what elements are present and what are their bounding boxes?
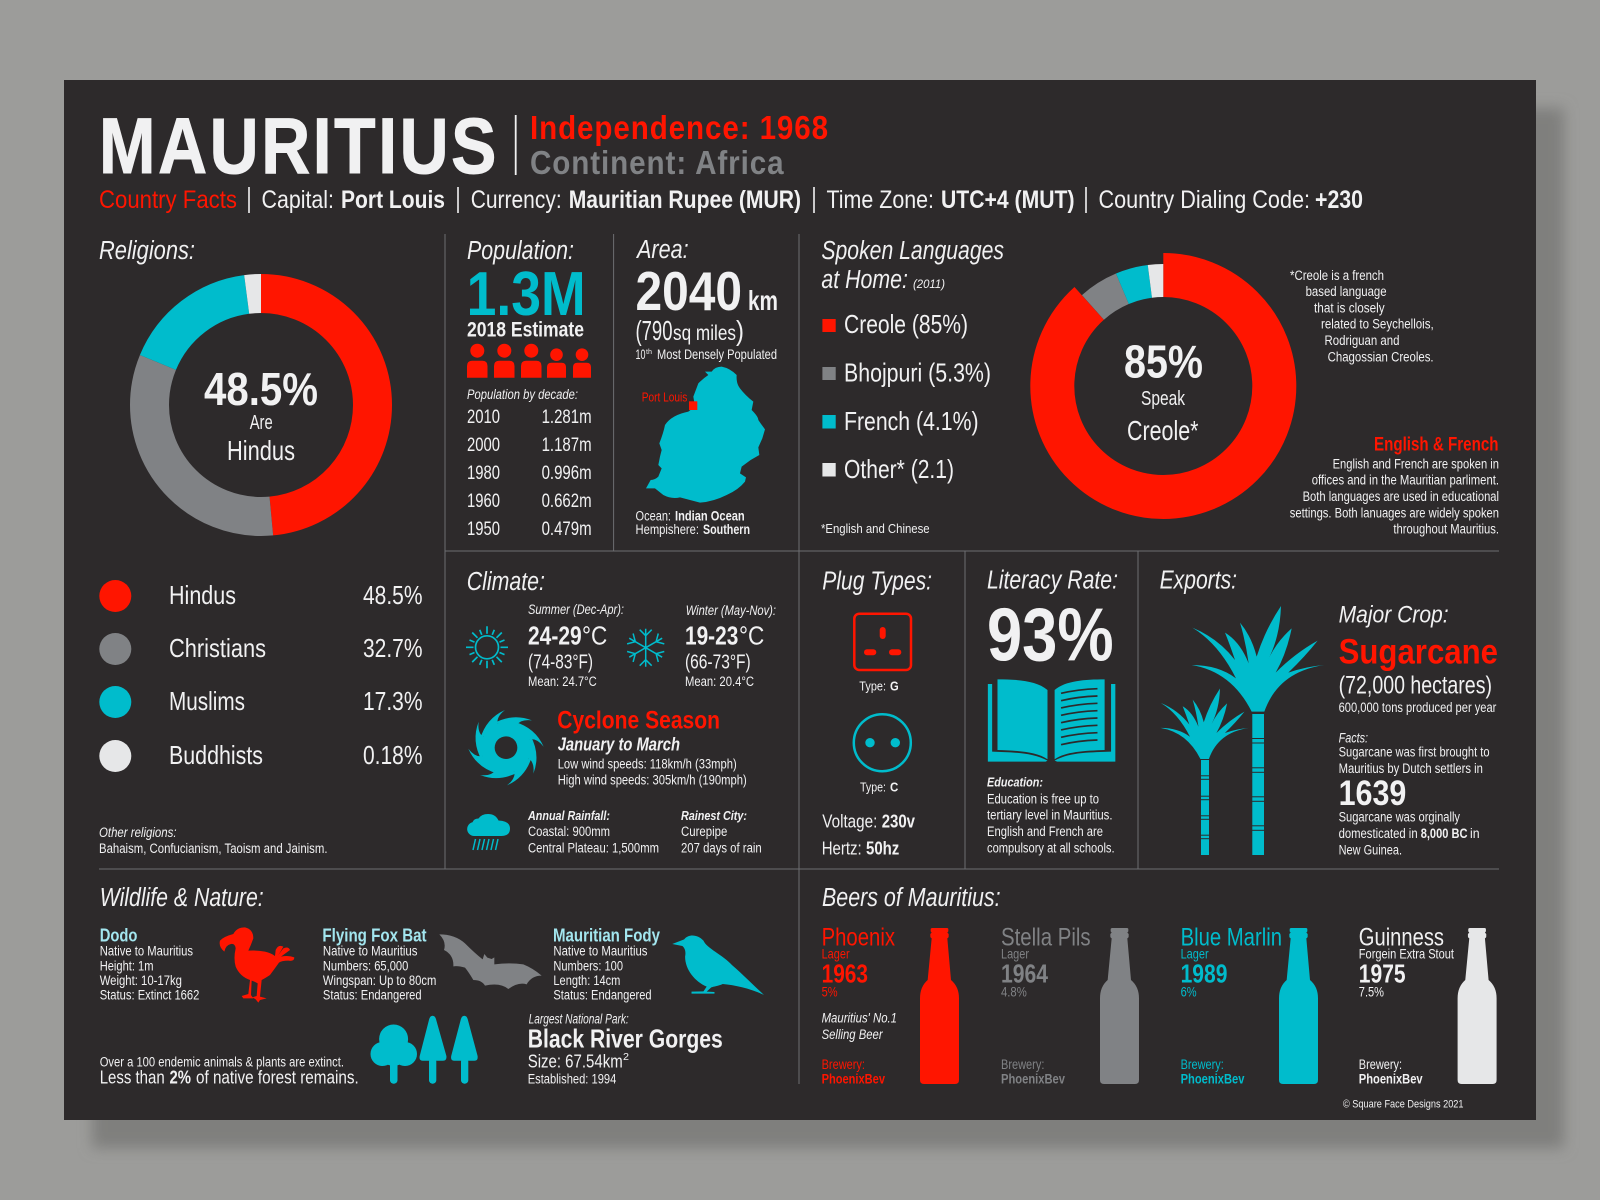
text: rainfall bbox=[527, 808, 659, 855]
icon: plug type C bbox=[854, 714, 911, 771]
beer: phoenix: Lager bbox=[822, 945, 850, 961]
note: creole bbox=[1290, 268, 1434, 364]
text: national park bbox=[528, 1011, 723, 1086]
legend: languages bbox=[822, 309, 991, 484]
legend: languages: Other* (2.1) bbox=[844, 454, 954, 484]
panel: spoken languages bbox=[821, 237, 1499, 537]
icon: dodo bbox=[220, 927, 294, 1003]
icon: trees bbox=[370, 1016, 478, 1084]
text: national park: Black River Gorges bbox=[528, 1023, 723, 1053]
text: education: Education is free up to bbox=[987, 791, 1099, 806]
text: dodo: Status: Extinct 1662 bbox=[100, 987, 199, 1002]
text: mauritian fody: Numbers: 100 bbox=[553, 959, 623, 974]
text: sugarcane facts: Facts: bbox=[1339, 731, 1368, 746]
country facts strip: Country Dialing Code: bbox=[1098, 186, 1310, 214]
table: population by decade: 1.281m bbox=[542, 407, 592, 428]
text: major crop: (72,000 hectares) bbox=[1339, 671, 1492, 699]
legend: religions: Buddhists bbox=[169, 740, 263, 770]
table: population by decade: 2000 bbox=[467, 435, 500, 456]
text: rainest city bbox=[681, 808, 762, 855]
independence: Independence: 1968 bbox=[530, 109, 829, 146]
panel: wildlife and nature bbox=[100, 884, 764, 1087]
beer: stella pils: Stella Pils bbox=[1001, 924, 1091, 952]
text: cyclone season: January to March bbox=[558, 735, 680, 755]
beer: stella pils: 4.8% bbox=[1001, 985, 1027, 1000]
beer: guinness: Forgein Extra Stout bbox=[1359, 945, 1454, 961]
heading: beers: Beers of Mauritius: bbox=[822, 884, 1001, 912]
note: english and french: English and French are spoken in bbox=[1333, 456, 1499, 471]
icon: red bottle bbox=[920, 928, 959, 1084]
text: mauritian fody bbox=[553, 926, 660, 1002]
donut chart: religions bbox=[150, 294, 372, 516]
note: english and french bbox=[1290, 435, 1499, 537]
text: dodo: Native to Mauritius bbox=[100, 944, 193, 959]
text: sugarcane facts: Sugarcane was first brought to bbox=[1339, 745, 1490, 760]
icon: cyclone bbox=[461, 703, 551, 793]
country facts strip: Port Louis bbox=[341, 186, 445, 214]
text: voltage and hertz: Voltage: bbox=[822, 812, 877, 832]
heading: languages bbox=[821, 237, 1004, 294]
beer: blue marlin: 1989 bbox=[1181, 958, 1227, 988]
stat: square miles: (790 bbox=[636, 315, 672, 346]
legend: languages: French (4.1%) bbox=[844, 406, 979, 436]
heading: religions: Religions: bbox=[99, 237, 195, 265]
donut centre label: Are bbox=[250, 412, 273, 434]
text: flying fox bat bbox=[322, 926, 436, 1002]
text: voltage and hertz: 50hz bbox=[866, 838, 899, 858]
text: summer: Summer (Dec-Apr): bbox=[528, 602, 624, 617]
legend: religions: Muslims bbox=[169, 686, 245, 716]
note: other religions bbox=[99, 825, 328, 856]
stat: 1.3M: 1.3M bbox=[467, 260, 586, 329]
beer: stella pils bbox=[1001, 924, 1091, 1086]
density note bbox=[636, 346, 777, 362]
note: creole: related to Seychellois, bbox=[1321, 317, 1434, 332]
text: winter: (66-73°F) bbox=[685, 652, 751, 674]
beer: guinness bbox=[1359, 924, 1454, 1086]
country facts strip: Time Zone: bbox=[826, 186, 934, 214]
legend: religions: 0.18% bbox=[363, 740, 422, 770]
note: english and french: offices and in the Mauritian parliment. bbox=[1312, 473, 1499, 488]
beer: guinness: 7.5% bbox=[1359, 985, 1384, 1000]
text: major crop: Major Crop: bbox=[1339, 602, 1449, 629]
text: major crop: 600,000 tons produced per year bbox=[1339, 700, 1497, 715]
text: mauritian fody: Length: 14cm bbox=[553, 973, 620, 988]
note: creole: *Creole is a french bbox=[1290, 268, 1384, 283]
legend: religions: 17.3% bbox=[363, 686, 422, 716]
text: voltage and hertz bbox=[822, 812, 915, 858]
area notes bbox=[636, 509, 750, 537]
text: sugarcane facts: Mauritius by Dutch settlers in bbox=[1339, 761, 1483, 776]
stat: square miles: sq miles bbox=[673, 322, 736, 345]
text: rainest city: Curepipe bbox=[681, 824, 727, 839]
table: population by decade bbox=[467, 387, 592, 540]
density note: 10 bbox=[636, 346, 646, 362]
note: creole: based language bbox=[1306, 284, 1387, 299]
text: national park: Size: 67.54km bbox=[528, 1051, 623, 1071]
text: mauritian fody: Mauritian Fody bbox=[553, 926, 660, 946]
density note: Most Densely Populated bbox=[657, 346, 777, 362]
text: forest: of native forest remains. bbox=[196, 1067, 359, 1087]
panel: exports bbox=[1160, 566, 1498, 857]
text: education: compulsory at all schools. bbox=[987, 840, 1115, 855]
poster panel background bbox=[64, 80, 1536, 1120]
text: cyclone season: High wind speeds: 305km/h (190mph) bbox=[558, 773, 747, 788]
donut centre label: languages: 85% bbox=[1124, 336, 1203, 388]
label: type C: Type: bbox=[860, 779, 886, 794]
country facts strip bbox=[99, 186, 1363, 214]
icon: sun bbox=[466, 626, 508, 668]
text: mauritian fody: Native to Mauritius bbox=[553, 944, 648, 959]
table: population by decade: 0.662m bbox=[542, 491, 592, 512]
text: sugarcane facts: 1639 bbox=[1339, 774, 1406, 813]
stat: 2040 km: 2040 bbox=[636, 260, 742, 322]
beer: blue marlin: 6% bbox=[1181, 985, 1197, 1000]
table: population by decade: 1.187m bbox=[542, 435, 592, 456]
stat: 2040 km: km bbox=[748, 285, 778, 316]
text: sugarcane facts: domesticated in bbox=[1339, 826, 1418, 841]
panel: plug types bbox=[822, 567, 932, 858]
text: summer bbox=[528, 602, 624, 689]
donut centre label: languages: Creole* bbox=[1127, 415, 1199, 446]
country facts strip: +230 bbox=[1315, 186, 1363, 214]
text: mauritian fody: Status: Endangered bbox=[553, 987, 652, 1002]
text: flying fox bat: Numbers: 65,000 bbox=[323, 959, 408, 974]
legend: languages: Creole (85%) bbox=[844, 309, 968, 339]
note: creole: that is closely bbox=[1314, 300, 1385, 315]
text: voltage and hertz: 230v bbox=[882, 812, 915, 832]
panel: religions bbox=[99, 237, 422, 856]
map: Mauritius: Port Louis bbox=[642, 390, 688, 405]
country facts strip: Mauritian Rupee (MUR) bbox=[569, 186, 801, 214]
text: national park: Largest National Park: bbox=[529, 1011, 629, 1026]
legend: religions: 48.5% bbox=[363, 580, 422, 610]
heading: literacy: Literacy Rate: bbox=[987, 566, 1118, 594]
heading: languages: (2011) bbox=[913, 277, 945, 291]
beer: stella pils: Brewery: bbox=[1001, 1057, 1044, 1072]
label: type C: C bbox=[890, 779, 899, 794]
beer: guinness: PhoenixBev bbox=[1359, 1071, 1423, 1086]
donut centre label: languages: Speak bbox=[1141, 388, 1186, 410]
note: english and french: Both languages are used in educational bbox=[1303, 489, 1499, 504]
text: winter: Mean: 20.4°C bbox=[685, 674, 754, 689]
country facts strip: Country Facts bbox=[99, 186, 237, 214]
table: population by decade: 1960 bbox=[467, 491, 500, 512]
text: flying fox bat: Native to Mauritius bbox=[323, 944, 418, 959]
beer: phoenix: Brewery: bbox=[822, 1057, 865, 1072]
icon: blue bottle bbox=[1279, 928, 1318, 1084]
icon: white bottle bbox=[1458, 928, 1497, 1084]
text: forest: Over a 100 endemic animals & plants are extinct. bbox=[100, 1055, 344, 1070]
stat: square miles: ) bbox=[736, 315, 744, 346]
text: summer: (74-83°F) bbox=[528, 652, 593, 674]
area notes: Hempishere: bbox=[636, 522, 699, 537]
note: other religions: Bahaism, Confucianism, Taoism and Jainism. bbox=[99, 841, 328, 856]
area notes: Ocean: bbox=[636, 509, 671, 524]
text: education: Education: bbox=[987, 775, 1043, 790]
icon: small sugarcane bbox=[1160, 689, 1249, 855]
beer: blue marlin: Blue Marlin bbox=[1181, 924, 1282, 952]
text: cyclone season: Cyclone Season bbox=[557, 706, 720, 734]
text: summer: Mean: 24.7°C bbox=[528, 674, 597, 689]
beer: phoenix: Phoenix bbox=[822, 924, 895, 952]
donut chart: languages bbox=[1052, 275, 1274, 497]
heading: plug types: Plug Types: bbox=[822, 567, 932, 595]
note: creole: Rodriguan and bbox=[1324, 333, 1400, 348]
text: rainest city: Rainest City: bbox=[681, 808, 747, 823]
copyright: © Square Face Designs 2021 bbox=[1343, 1098, 1464, 1110]
table: population by decade: 0.479m bbox=[542, 519, 592, 540]
icon: people bbox=[467, 344, 591, 378]
legend: religions bbox=[99, 580, 423, 772]
donut centre label: 48.5% bbox=[204, 363, 318, 415]
table: population by decade: 0.996m bbox=[542, 463, 592, 484]
text: forest bbox=[100, 1055, 359, 1087]
note: english and french: English & French bbox=[1374, 435, 1498, 456]
text: rainfall: Annual Rainfall: bbox=[527, 808, 610, 823]
table: population by decade: 2010 bbox=[467, 407, 500, 428]
panel: climate bbox=[461, 568, 776, 855]
stat caption: 2018 Estimate bbox=[467, 319, 584, 342]
icon: bat bbox=[439, 934, 542, 989]
continent: Continent: Africa bbox=[530, 144, 784, 181]
beer: blue marlin bbox=[1181, 924, 1282, 1086]
heading: languages: at Home: bbox=[821, 266, 908, 294]
text: forest: Less than bbox=[100, 1067, 165, 1087]
panel: population bbox=[467, 237, 592, 540]
footnote: languages: *English and Chinese bbox=[821, 521, 930, 536]
text: rainfall: Coastal: 900mm bbox=[528, 824, 610, 839]
text: winter: Winter (May-Nov): bbox=[686, 603, 776, 618]
label: type G: Type: bbox=[859, 679, 886, 694]
text: flying fox bat: Flying Fox Bat bbox=[322, 926, 427, 946]
text: voltage and hertz: Hertz: bbox=[822, 838, 862, 858]
heading: area: Area: bbox=[635, 236, 689, 264]
beer: phoenix: PhoenixBev bbox=[822, 1071, 885, 1086]
beer: guinness: Guinness bbox=[1359, 924, 1444, 952]
text: major crop: Sugarcane bbox=[1339, 632, 1498, 671]
text: education bbox=[987, 775, 1115, 855]
text: sugarcane facts: in bbox=[1470, 826, 1480, 841]
title: MAURITIUS bbox=[99, 101, 499, 190]
beer: blue marlin: Brewery: bbox=[1181, 1057, 1224, 1072]
text: dodo bbox=[100, 926, 199, 1002]
stat: square miles bbox=[636, 315, 744, 346]
icon: open book bbox=[988, 679, 1115, 762]
country facts strip: Currency: bbox=[471, 186, 562, 214]
note: english and french: throughout Mauritius. bbox=[1393, 522, 1499, 537]
beer: blue marlin: PhoenixBev bbox=[1181, 1071, 1245, 1086]
table: population by decade: 1950 bbox=[467, 519, 500, 540]
label: type G: G bbox=[890, 679, 899, 694]
heading: population: Population: bbox=[467, 237, 574, 265]
text: sugarcane facts: Sugarcane was orginally bbox=[1339, 810, 1460, 825]
donut centre label bbox=[204, 363, 318, 466]
note: other religions: Other religions: bbox=[99, 825, 177, 840]
note: english and french: settings. Both lanuages are widely spoken bbox=[1290, 505, 1499, 520]
beer: phoenix: Mauritius' No.1 bbox=[822, 1011, 897, 1026]
text: sugarcane facts: 8,000 BC bbox=[1421, 826, 1468, 841]
legend: religions: 32.7% bbox=[363, 633, 422, 663]
panel: area bbox=[635, 236, 778, 537]
heading: languages: Spoken Languages bbox=[821, 237, 1004, 265]
beer: stella pils: 1964 bbox=[1001, 958, 1048, 988]
icon: fody bird bbox=[672, 935, 764, 995]
text: winter: °C bbox=[739, 621, 764, 651]
beer: phoenix: 5% bbox=[822, 985, 838, 1000]
text: flying fox bat: Status: Endangered bbox=[323, 987, 422, 1002]
beer: phoenix bbox=[822, 924, 897, 1086]
legend: religions: Hindus bbox=[169, 580, 236, 610]
text: forest: 2% bbox=[170, 1067, 191, 1087]
map: Mauritius bbox=[642, 367, 765, 503]
icon: snowflake bbox=[626, 629, 665, 667]
text: national park: Established: 1994 bbox=[528, 1071, 617, 1086]
area notes: Indian Ocean bbox=[675, 509, 745, 524]
text: flying fox bat: Wingspan: Up to 80cm bbox=[323, 973, 436, 988]
beer: blue marlin: Lager bbox=[1181, 945, 1209, 961]
table: population by decade: 1980 bbox=[467, 463, 500, 484]
text: cyclone season: Low wind speeds: 118km/h (33mph) bbox=[558, 756, 737, 771]
heading: climate: Climate: bbox=[467, 568, 545, 596]
heading: exports: Exports: bbox=[1160, 566, 1237, 594]
text: sugarcane facts bbox=[1339, 731, 1490, 857]
text: cyclone season bbox=[557, 706, 747, 788]
beer: phoenix: Selling Beer bbox=[822, 1027, 883, 1042]
country facts strip: Capital: bbox=[262, 186, 334, 214]
panel: literacy rate bbox=[987, 566, 1118, 855]
donut centre label: languages bbox=[1124, 336, 1203, 446]
text: winter bbox=[685, 603, 776, 689]
text: education: English and French are bbox=[987, 824, 1103, 839]
beer: phoenix: 1963 bbox=[822, 958, 868, 988]
country facts strip: UTC+4 (MUT) bbox=[941, 186, 1074, 214]
panel: beers of mauritius bbox=[822, 884, 1497, 1086]
legend: religions: Christians bbox=[169, 633, 266, 663]
icon: rain cloud bbox=[467, 814, 510, 850]
legend: languages: Bhojpuri (5.3%) bbox=[844, 358, 991, 388]
text: winter: 19-23 bbox=[685, 621, 738, 651]
text: rainfall: Central Plateau: 1,500mm bbox=[528, 840, 659, 855]
text: summer: °C bbox=[582, 621, 607, 651]
density note: th bbox=[646, 349, 652, 356]
text: rainest city: 207 days of rain bbox=[681, 840, 762, 855]
beer: guinness: Brewery: bbox=[1359, 1057, 1402, 1072]
text: summer: 24-29 bbox=[528, 621, 582, 651]
text: sugarcane facts: New Guinea. bbox=[1339, 842, 1402, 857]
text: national park: 2 bbox=[623, 1052, 629, 1063]
icon: plug type G bbox=[854, 614, 911, 670]
text: major crop bbox=[1339, 602, 1498, 715]
area notes: Southern bbox=[703, 522, 750, 537]
heading: wildlife: Wildlife & Nature: bbox=[100, 884, 264, 912]
beer: stella pils: Lager bbox=[1001, 945, 1029, 961]
icon: grey bottle bbox=[1100, 928, 1139, 1084]
beer: stella pils: PhoenixBev bbox=[1001, 1071, 1065, 1086]
text: education: tertiary level in Mauritius. bbox=[987, 808, 1112, 823]
note: creole: Chagossian Creoles. bbox=[1328, 349, 1434, 364]
icon: large sugarcane bbox=[1192, 606, 1324, 855]
text: dodo: Dodo bbox=[100, 926, 137, 946]
donut centre label: Hindus bbox=[227, 435, 295, 466]
text: dodo: Weight: 10-17kg bbox=[100, 973, 182, 988]
table: population by decade: Population by decade: bbox=[467, 387, 578, 402]
title block bbox=[99, 101, 829, 190]
beer: guinness: 1975 bbox=[1359, 958, 1406, 988]
text: dodo: Height: 1m bbox=[100, 959, 154, 974]
stat: 93%: 93% bbox=[987, 593, 1114, 677]
